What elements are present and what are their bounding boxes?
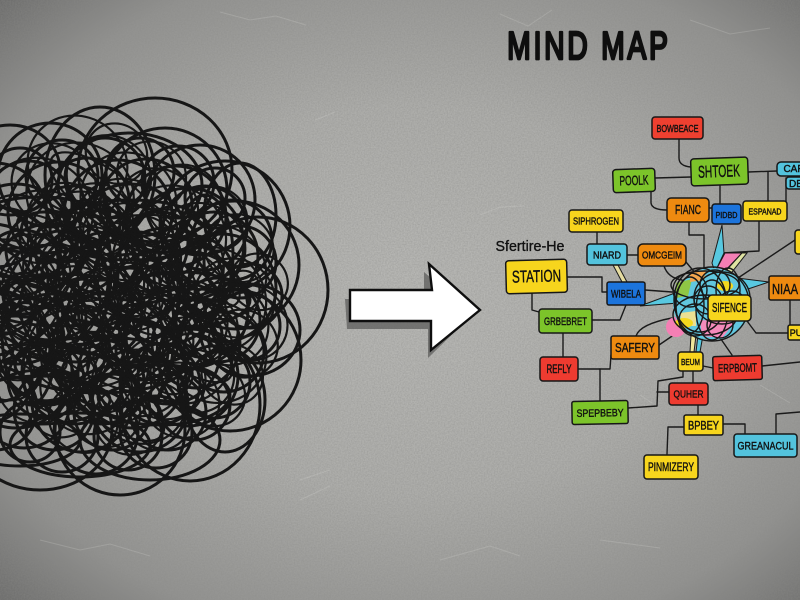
central tangled hub: [666, 267, 751, 341]
node: blue PIDBD: PIDBD: [716, 210, 738, 220]
node: POOLK: [613, 168, 655, 193]
title: MIND MAP: [507, 25, 671, 68]
node: SIFENCE: [708, 295, 751, 321]
node: REFLY: [540, 357, 578, 381]
node: PINMIZERY: [644, 455, 698, 479]
node: SIPHROGEN: SIPHROGEN: [573, 216, 619, 228]
node: SHTOEK: SHTOEK: [698, 161, 741, 182]
node: NIAA: [769, 276, 800, 300]
node: ERPBOMT: ERPBOMT: [718, 360, 758, 375]
node: FIANC: FIANC: [675, 202, 701, 217]
node: right edge yellow: [795, 230, 800, 254]
tangled scribble: [0, 73, 345, 524]
node: blue PIDBD: [712, 204, 741, 224]
node: GRBEBRET: [539, 309, 592, 333]
node: OMCGEIM: OMCGEIM: [642, 250, 682, 262]
node: POOLK: POOLK: [619, 172, 649, 189]
node: FIANC: [667, 198, 709, 222]
node: STATION: STATION: [512, 266, 561, 287]
colour wedges radiating from hub: [613, 225, 769, 352]
node: BPBEY: [684, 415, 723, 435]
node: GREANACUL: [734, 434, 797, 457]
node: SIPHROGEN: [569, 210, 623, 232]
node: ERPBOMT: [713, 355, 762, 381]
node: SAFERY: [611, 336, 659, 359]
node: GRBEBRET: GRBEBRET: [544, 316, 587, 328]
node: cyan D: [786, 177, 800, 190]
arrow: [345, 264, 480, 358]
node: REFLY: REFLY: [546, 364, 572, 376]
node: BOWBEACE: BOWBEACE: [656, 124, 699, 135]
node: BEUM: [678, 352, 703, 371]
node: NIARD: [587, 244, 627, 265]
node: ESPANAD: ESPANAD: [748, 206, 782, 216]
node: WIBELA: [607, 282, 645, 305]
node: WIBELA: WIBELA: [611, 288, 641, 300]
node: SIFENCE: SIFENCE: [712, 301, 747, 315]
node: BPBEY: BPBEY: [688, 420, 719, 432]
node: ESPANAD: [743, 201, 787, 221]
connector lines: [532, 139, 800, 454]
node: BOWBEACE: [652, 117, 703, 139]
node: NIARD: NIARD: [593, 250, 621, 262]
node: SPEPBEBY: SPEPBEBY: [576, 407, 624, 420]
node: SPEPBEBY: [572, 401, 628, 424]
node: STATION: [506, 259, 567, 294]
node: BEUM: BEUM: [681, 357, 700, 367]
node: QUHER: [669, 383, 708, 405]
node: PU: [788, 325, 800, 340]
handwritten label: Sfertire-He: Sfertire-He: [496, 239, 564, 255]
node: SAFERY: SAFERY: [615, 340, 655, 355]
node: PINMIZERY: PINMIZERY: [648, 462, 694, 474]
node: cyan CA: [777, 162, 800, 176]
node: OMCGEIM: [638, 244, 686, 266]
node: QUHER: QUHER: [674, 388, 704, 400]
node: SHTOEK: [691, 157, 748, 186]
